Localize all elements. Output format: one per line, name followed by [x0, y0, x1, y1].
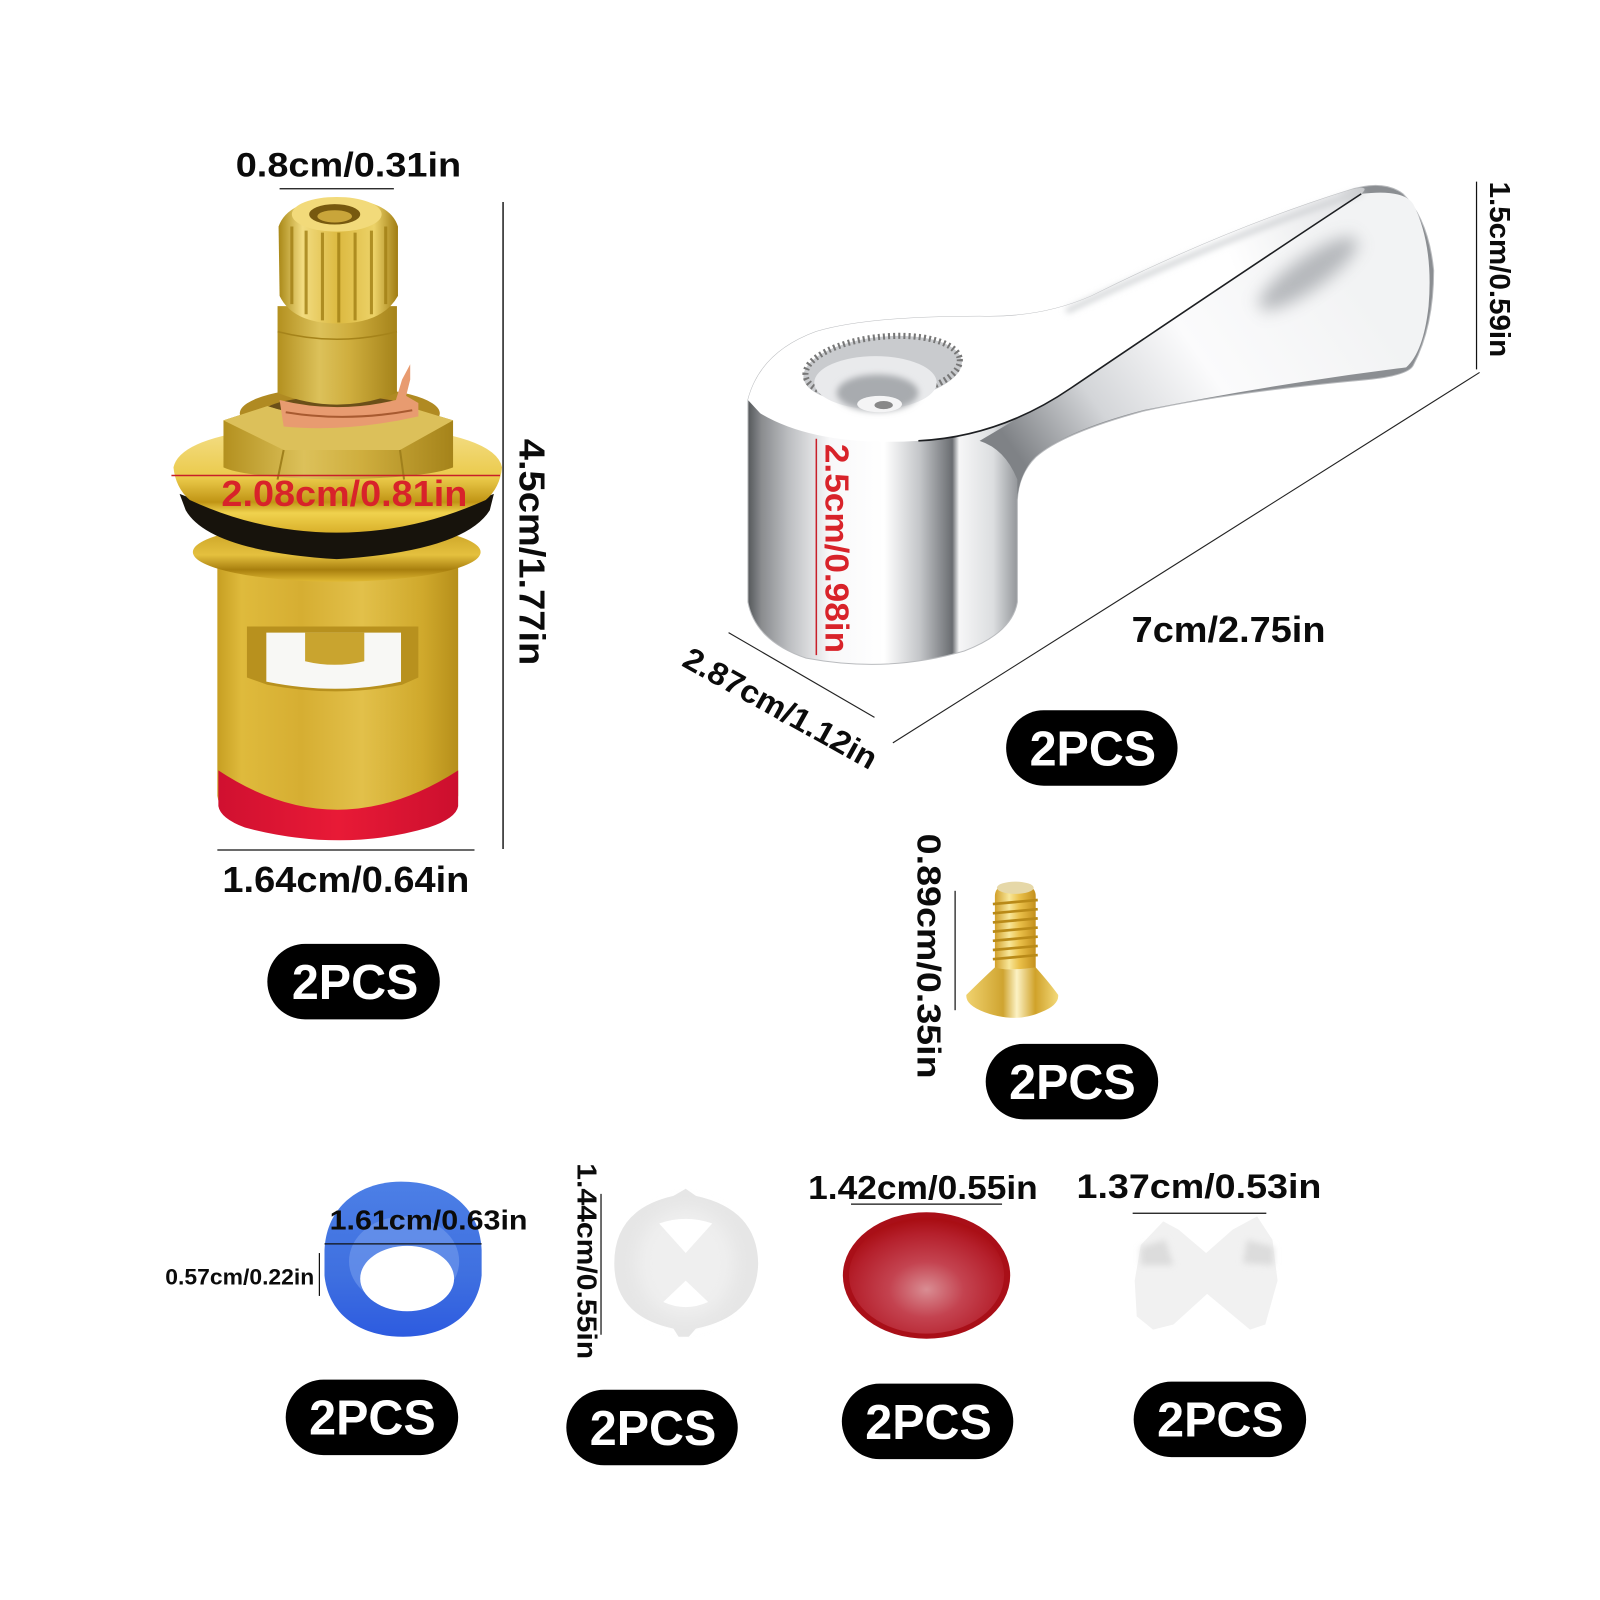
knurled top — [279, 198, 398, 323]
quantity badge: button: 2PCS — [865, 1396, 992, 1450]
quantity badge: screw: 2PCS — [1009, 1056, 1136, 1110]
dimension: 0.57cm ring height: 0.57cm/0.22in — [165, 1265, 314, 1290]
dimension: 1.5cm lever width: 1.5cm/0.59in — [1483, 182, 1515, 357]
quantity badge: button — [842, 1384, 1013, 1459]
part: white ceramic disc — [614, 1189, 758, 1337]
part: white bow-tie seal — [1135, 1216, 1278, 1330]
dimension: 7cm handle length — [893, 372, 1480, 743]
top edge line — [918, 194, 1361, 441]
hexagonal nut — [223, 406, 453, 480]
dimension: 2.5cm handle height: 2.5cm/0.98in — [818, 444, 855, 653]
quantity badge: handle: 2PCS — [1030, 722, 1156, 776]
quantity badge: ring — [286, 1380, 458, 1455]
dimension: 1.64cm base width: 1.64cm/0.64in — [222, 860, 469, 900]
upper washer — [240, 387, 440, 440]
black o-ring — [180, 494, 494, 559]
cartridge body — [217, 561, 458, 836]
dimension: 4.5cm height: 4.5cm/1.77in — [511, 439, 551, 665]
quantity badge: seal: 2PCS — [1157, 1394, 1284, 1448]
top face — [748, 188, 1365, 442]
part: red indicator button — [843, 1212, 1010, 1339]
part: brass screw — [966, 882, 1058, 1018]
dimension: 2.87cm handle depth: 2.87cm/1.12in — [677, 640, 884, 776]
knurled screw recess — [800, 329, 965, 412]
part: blue seal ring — [324, 1182, 482, 1337]
dimension: 2.08cm flange width: 2.08cm/0.81in — [221, 474, 467, 514]
dimension: 1.37cm seal width: 1.37cm/0.53in — [1077, 1168, 1321, 1206]
quantity badge: handle — [1006, 710, 1178, 786]
lever shadow dimple — [1250, 226, 1366, 321]
lever blade face — [980, 193, 1430, 500]
red base cap — [218, 770, 458, 840]
dimension: 1.61cm ring width: 1.61cm/0.63in — [330, 1205, 528, 1236]
dimension: 0.8cm top width: 0.8cm/0.31in — [236, 147, 461, 185]
dimension: 0.89cm screw length: 0.89cm/0.35in — [909, 834, 946, 1079]
dimension: 7cm handle length: 7cm/2.75in — [1132, 610, 1326, 650]
part: chrome lever handle — [748, 185, 1434, 664]
flange — [173, 423, 502, 533]
handle silhouette — [748, 185, 1434, 664]
quantity badge: seal — [1134, 1382, 1306, 1457]
quantity badge: disc — [566, 1390, 738, 1465]
dimension: 1.42cm button width: 1.42cm/0.55in — [808, 1170, 1038, 1207]
copper spring — [280, 364, 418, 428]
dimension: 1.44cm disc diameter: 1.44cm/0.55in — [572, 1163, 603, 1359]
quantity badge: screw — [986, 1044, 1158, 1119]
upper edge soft shading — [1066, 192, 1362, 311]
stem — [278, 306, 397, 405]
lower lip — [193, 522, 481, 582]
quantity badge: cartridge: 2PCS — [292, 956, 418, 1010]
body window — [247, 627, 418, 691]
part: brass faucet cartridge — [173, 197, 502, 840]
quantity badge: disc: 2PCS — [590, 1402, 716, 1456]
quantity badge: cartridge — [267, 944, 440, 1019]
quantity badge: ring: 2PCS — [309, 1392, 436, 1446]
